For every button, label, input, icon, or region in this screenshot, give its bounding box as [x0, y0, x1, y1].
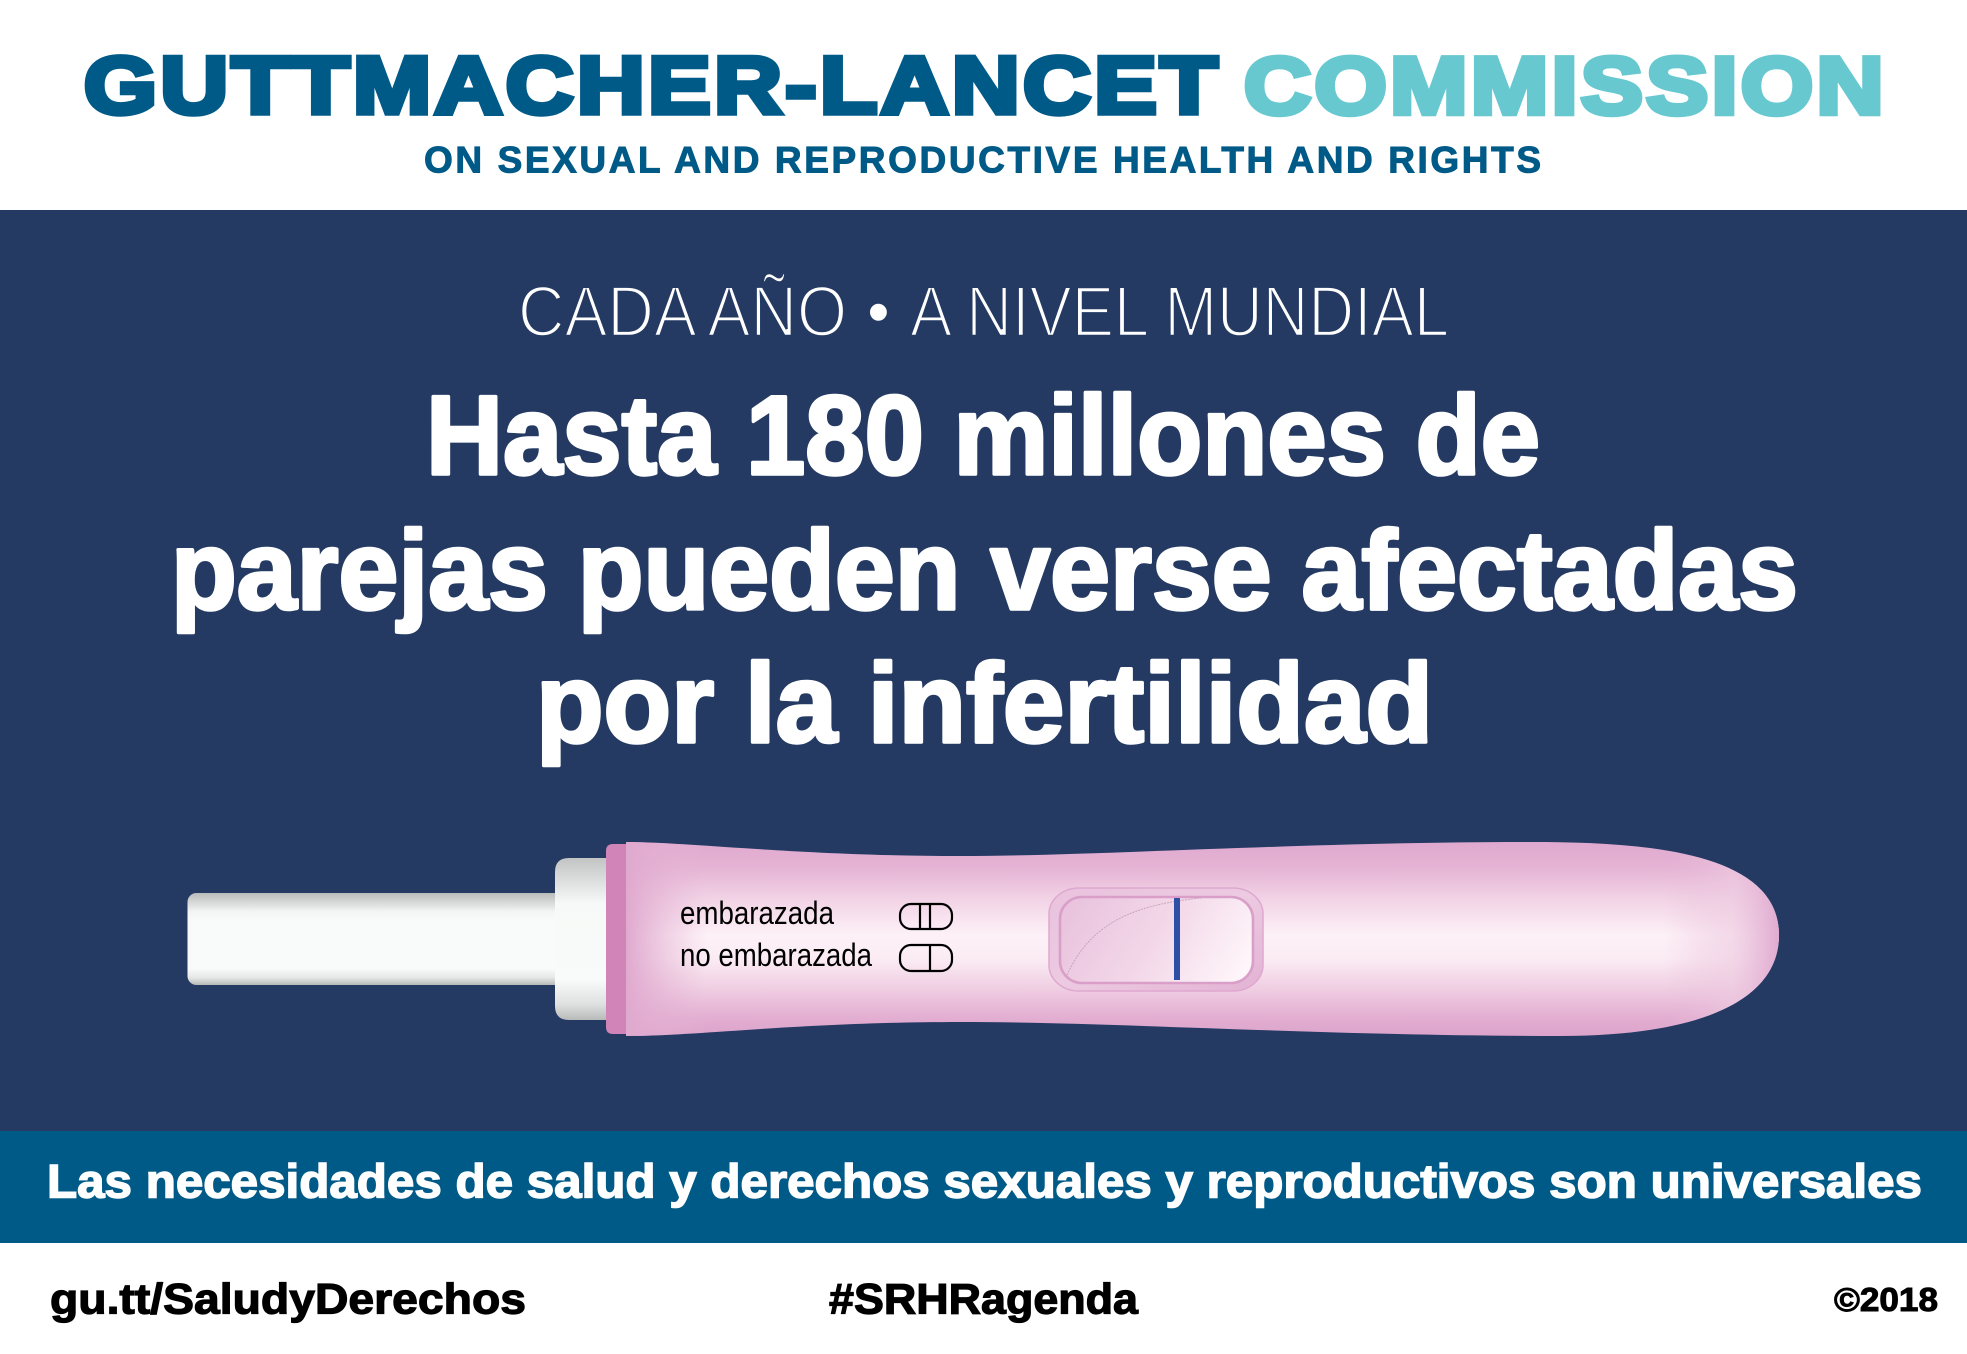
- main headline: parejas pueden verse afectadas: [171, 508, 1798, 633]
- footer hashtag: #SRHRagenda: [829, 1276, 1139, 1324]
- pregnancy test illustration: [188, 842, 1779, 1036]
- main headline: [171, 373, 1798, 766]
- kicker text: [518, 273, 1449, 352]
- icon: one line result: [900, 945, 952, 971]
- slogan bar: [0, 1131, 1967, 1243]
- panel: main navy background: [0, 210, 1967, 1131]
- icon: two lines result: [900, 904, 952, 929]
- label: no embarazada: no embarazada: [680, 937, 872, 973]
- kicker text: CADA AÑO: [518, 273, 847, 352]
- absorbent white tip: [188, 893, 568, 985]
- title: GUTTMACHER-LANCET: [84, 41, 1221, 131]
- result window: [1049, 888, 1263, 991]
- slogan bar: Las necesidades de salud y derechos sexuales y reproductivos son universales: [47, 1154, 1922, 1208]
- subtitle: ON SEXUAL AND REPRODUCTIVE HEALTH AND RIGHTS: [424, 140, 1541, 180]
- footer url: gu.tt/SaludyDerechos: [50, 1276, 526, 1324]
- main headline: por la infertilidad: [536, 641, 1433, 766]
- blue test line: [1174, 898, 1180, 980]
- pink body: [626, 842, 1779, 1036]
- white collar: [555, 858, 606, 1020]
- dark pink band: [606, 844, 630, 1034]
- kicker text: •: [866, 273, 891, 352]
- copyright: ©2018: [1834, 1281, 1938, 1318]
- title: [84, 41, 1887, 132]
- main headline: Hasta 180 millones de: [426, 373, 1540, 498]
- kicker text: A NIVEL MUNDIAL: [910, 273, 1449, 352]
- label: embarazada: embarazada: [680, 895, 834, 931]
- title: COMMISSION: [1244, 42, 1887, 132]
- header background: [0, 0, 1967, 210]
